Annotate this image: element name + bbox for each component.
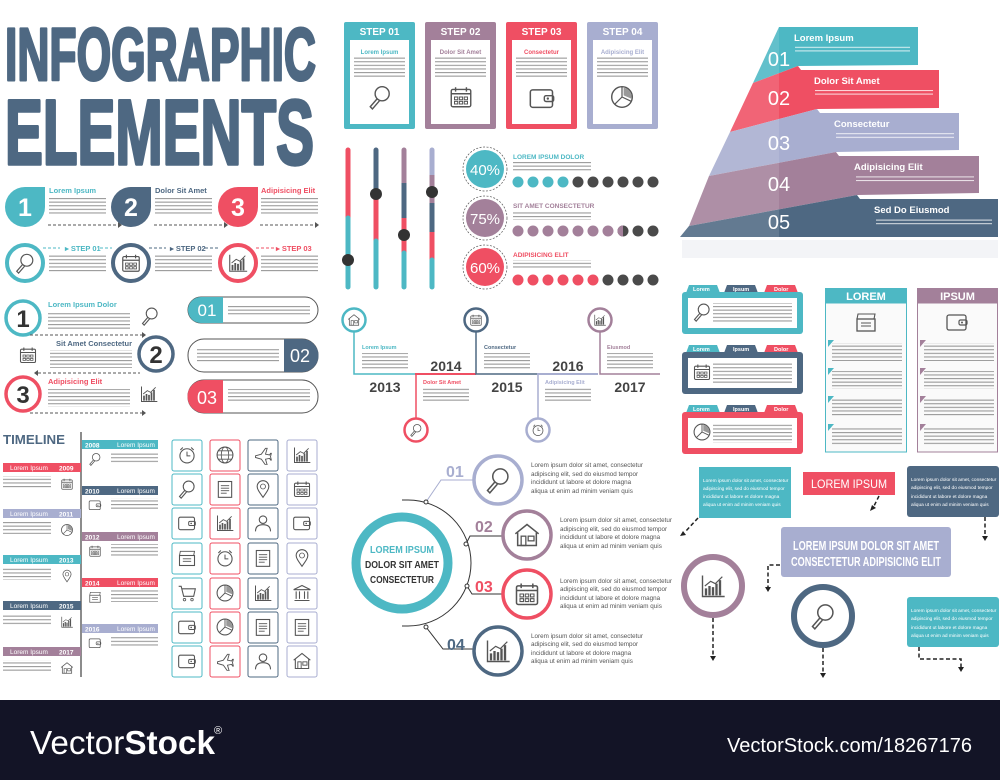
panel: step cards: Consectetur	[524, 50, 560, 56]
left entries: Lorem Ipsum	[10, 511, 48, 518]
left entries: 2011	[59, 512, 73, 518]
left entries: 2009	[59, 466, 74, 472]
panel: step rings: ▸ STEP 02	[169, 244, 206, 253]
left entries: Lorem Ipsum	[10, 649, 48, 656]
panel: numbered teardrops: 3	[231, 194, 245, 222]
panel: circle diagram: 04	[447, 637, 465, 654]
panel: flowchart: aliqua ut enim ad minim veniam quis	[911, 502, 989, 508]
left entries: Lorem Ipsum	[10, 465, 48, 472]
panel: circle diagram: adipiscing elit, sed do eiusmod tempor	[560, 586, 667, 593]
panel: numbered teardrops: 2	[124, 194, 138, 222]
panel: step cards	[344, 22, 658, 129]
panel: circle diagram: incididunt ut labore et dolore magna	[531, 650, 632, 657]
panel: pyramid: 05	[768, 212, 790, 234]
panel: horizontal timeline: 2017	[614, 379, 646, 395]
panel: step cards: Dolor Sit Amet	[440, 50, 481, 56]
panel: percentage dots: 75%	[470, 211, 500, 228]
panel: pyramid: Dolor Sit Amet	[814, 76, 880, 87]
right entries	[82, 440, 158, 648]
panel: circle diagram: adipiscing elit, sed do eiusmod tempor	[560, 526, 667, 533]
panel: tabbed boxes: Lorem	[693, 407, 710, 413]
panel: horizontal timeline: 2016	[552, 358, 584, 374]
right entries: 2014	[85, 580, 100, 588]
footer bar: VectorStock	[30, 724, 216, 761]
panel: circle diagram: DOLOR SIT AMET	[365, 559, 439, 571]
panel: circle diagram: aliqua ut enim ad minim veniam quis	[560, 603, 662, 610]
panel: numbered teardrops: Dolor Sit Amet	[155, 186, 207, 195]
panel: horizontal timeline: 2014	[430, 358, 462, 374]
panel: circle diagram: aliqua ut enim ad minim veniam quis	[531, 488, 633, 495]
right entries: 2010	[85, 488, 100, 496]
panel: step rings	[7, 244, 318, 281]
panel: horizontal timeline: Dolor Sit Amet	[423, 380, 461, 386]
panel: circle diagram: incididunt ut labore et dolore magna	[531, 479, 632, 486]
panel: zigzag numbered list: 1	[16, 306, 30, 333]
left entries: Lorem Ipsum	[10, 557, 48, 564]
panel: horizontal timeline	[342, 308, 660, 442]
panel: pyramid: Sed Do Eiusmod	[874, 205, 950, 216]
panel: pyramid: 04	[768, 174, 790, 196]
panel: step cards: Lorem Ipsum	[361, 50, 398, 56]
panel: tabbed boxes: Lorem	[693, 347, 710, 353]
panel: tabbed boxes	[682, 285, 803, 454]
panel: numbered teardrops	[5, 186, 319, 228]
panel: timeline vertical	[3, 432, 158, 677]
panel: flowchart: CONSECTETUR ADIPISICING ELIT	[791, 555, 941, 569]
footer bar: ®	[214, 725, 222, 737]
panel: percentage dots: SIT AMET CONSECTETUR	[513, 203, 595, 210]
panel: tabbed boxes: Dolor	[774, 287, 789, 293]
panel: flowchart: Lorem ipsum dolor sit amet, consectetur	[703, 478, 789, 484]
panel: zigzag numbered list: Lorem Ipsum Dolor	[48, 300, 117, 309]
panel: pyramid: Consectetur	[834, 119, 890, 130]
panel: flowchart: LOREM IPSUM DOLOR SIT AMET	[793, 539, 939, 553]
panel: flowchart: adipiscing elit, sed do eiusmod tempor	[911, 485, 993, 491]
panel: circle diagram: Lorem ipsum dolor sit amet, consectetur	[531, 633, 643, 640]
panel: flowchart: aliqua ut enim ad minim veniam quis	[703, 502, 781, 508]
right entries: Lorem Ipsum	[117, 534, 155, 541]
panel: circle diagram: CONSECTETUR	[370, 574, 434, 586]
panel: zigzag numbered list: 2	[149, 342, 163, 369]
panel: circle diagram: adipiscing elit, sed do eiusmod tempor	[531, 471, 638, 478]
panel: circle diagram: 01	[446, 464, 464, 481]
panel: circle diagram: incididunt ut labore et dolore magna	[560, 595, 661, 602]
panel: flowchart: incididunt ut labore et dolore magna	[703, 494, 780, 500]
left entries: 2013	[59, 558, 74, 564]
panel: circle diagram: aliqua ut enim ad minim veniam quis	[560, 543, 662, 550]
left entries	[3, 463, 81, 673]
panel: horizontal timeline: 2013	[369, 379, 401, 395]
panel: percentage dots: 40%	[470, 162, 500, 179]
panel: pill list: 02	[290, 346, 310, 366]
panel: numbered teardrops: 1	[18, 194, 32, 222]
panel: circle diagram: adipiscing elit, sed do eiusmod tempor	[531, 641, 638, 648]
panel: numbered teardrops: Lorem Ipsum	[49, 186, 96, 195]
left entries: Lorem Ipsum	[10, 603, 48, 610]
panel: flowchart: adipiscing elit, sed do eiusmod tempor	[911, 616, 993, 622]
panel: tabbed boxes: Ipsum	[733, 287, 749, 293]
panel: tabbed boxes: Dolor	[774, 407, 789, 413]
panel: zigzag numbered list: Adipisicing Elit	[48, 377, 103, 386]
panel: flowchart: aliqua ut enim ad minim veniam quis	[911, 633, 989, 639]
panel: circle diagram: LOREM IPSUM	[370, 544, 434, 556]
panel: lorem ipsum columns	[825, 288, 998, 452]
panel: timeline vertical: TIMELINE	[3, 432, 65, 447]
right entries: 2008	[85, 442, 100, 450]
panel: tabbed boxes: Ipsum	[733, 347, 749, 353]
right entries: 2016	[85, 626, 100, 634]
panel: lorem ipsum columns: IPSUM	[940, 291, 975, 303]
panel: pyramid: Lorem Ipsum	[794, 33, 854, 44]
left entries: 2017	[59, 650, 74, 656]
panel: step cards: STEP 04	[603, 27, 643, 38]
panel: pill list: 01	[198, 301, 216, 320]
left entries: 2015	[59, 604, 74, 610]
panel: sliders	[342, 150, 438, 287]
panel: flowchart: incididunt ut labore et dolore magna	[911, 625, 988, 631]
panel: flowchart: LOREM IPSUM	[811, 477, 887, 491]
footer bar: VectorStock.com/18267176	[727, 735, 972, 757]
panel: pill list: 03	[197, 388, 217, 408]
panel: circle diagram: incididunt ut labore et dolore magna	[560, 534, 661, 541]
title: INFOGRAPHIC	[5, 13, 316, 96]
panel: percentage dots: 60%	[470, 260, 500, 277]
panel: pill list	[188, 297, 318, 413]
panel: pyramid: 01	[768, 49, 790, 71]
panel: step rings: ▸ STEP 01	[64, 244, 101, 253]
panel: pyramid: 03	[768, 133, 790, 155]
panel: zigzag numbered list: Sit Amet Consectetur	[56, 339, 132, 348]
panel: percentage dots	[463, 147, 658, 289]
right entries: Lorem Ipsum	[117, 488, 155, 495]
panel: tabbed boxes: Ipsum	[733, 407, 749, 413]
right entries: Lorem Ipsum	[117, 442, 155, 449]
right entries: 2012	[85, 534, 100, 542]
panel: numbered teardrops: Adipisicing Elit	[261, 186, 316, 195]
panel: circle diagram: 02	[475, 519, 493, 536]
panel: tabbed boxes: Lorem	[693, 287, 710, 293]
footer bar	[0, 700, 1000, 780]
panel: circle diagram: aliqua ut enim ad minim veniam quis	[531, 658, 633, 665]
panel: zigzag numbered list	[6, 300, 173, 416]
title	[5, 13, 316, 184]
panel: horizontal timeline: Adipisicing Elit	[545, 380, 585, 386]
panel: circle diagram	[356, 456, 672, 675]
panel: zigzag numbered list: 3	[16, 382, 30, 409]
panel: horizontal timeline: 2015	[491, 379, 523, 395]
panel: flowchart: Lorem ipsum dolor sit amet, consectetur	[911, 608, 997, 614]
panel: circle diagram: 03	[475, 579, 493, 596]
panel: step cards: STEP 02	[441, 27, 481, 38]
panel: circle diagram: Lorem ipsum dolor sit amet, consectetur	[560, 517, 672, 524]
panel: percentage dots: LOREM IPSUM DOLOR	[513, 154, 584, 161]
title: ELEMENTS	[5, 82, 314, 184]
panel: step cards: STEP 01	[360, 27, 400, 38]
panel: flowchart: Lorem ipsum dolor sit amet, consectetur	[911, 477, 997, 483]
panel: horizontal timeline: Consectetur	[484, 345, 517, 351]
panel: horizontal timeline: Eiusmod	[607, 345, 630, 351]
panel: flowchart: incididunt ut labore et dolore magna	[911, 494, 988, 500]
right entries: Lorem Ipsum	[117, 580, 155, 587]
panel: icon grid	[172, 440, 317, 677]
panel: pyramid	[680, 27, 998, 258]
panel: tabbed boxes: Dolor	[774, 347, 789, 353]
panel: pyramid: Adipisicing Elit	[854, 162, 923, 173]
panel: circle diagram: Lorem ipsum dolor sit amet, consectetur	[560, 578, 672, 585]
panel: pyramid: 02	[768, 88, 790, 110]
panel: step cards: Adipisicing Elit	[601, 50, 644, 56]
right entries: Lorem Ipsum	[117, 626, 155, 633]
panel: flowchart: adipiscing elit, sed do eiusmod tempor	[703, 486, 785, 492]
panel: lorem ipsum columns: LOREM	[846, 291, 886, 303]
panel: flowchart	[680, 466, 999, 678]
panel: step rings: ▸ STEP 03	[275, 244, 312, 253]
panel: percentage dots: ADIPISICING ELIT	[513, 252, 569, 259]
panel: horizontal timeline: Lorem Ipsum	[362, 345, 397, 351]
panel: circle diagram: Lorem ipsum dolor sit amet, consectetur	[531, 462, 643, 469]
panel: step cards: STEP 03	[522, 27, 562, 38]
